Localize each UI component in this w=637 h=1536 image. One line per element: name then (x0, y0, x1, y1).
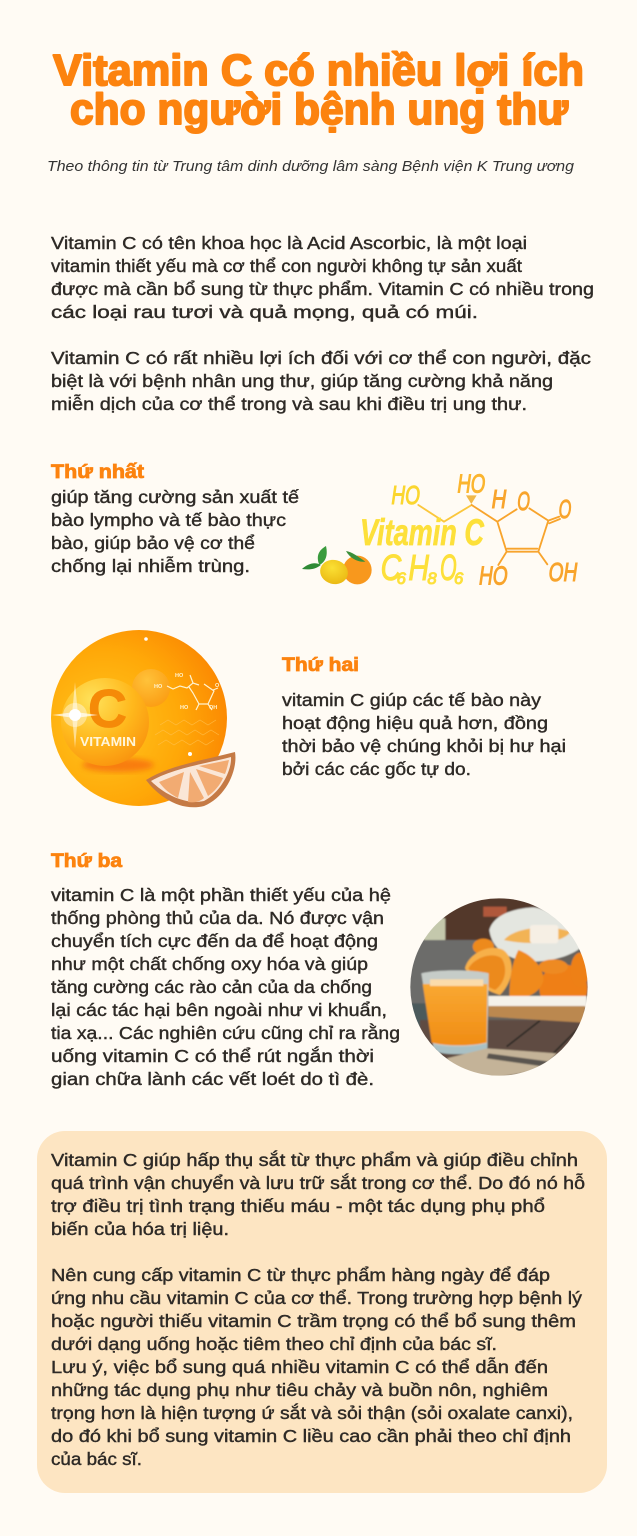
molecule labels: HO (180, 705, 189, 711)
sphere shadow (82, 758, 154, 772)
molecule labels: OH (549, 557, 577, 587)
text: recommendations and warnings: hoặc người thiếu vitamin C trầm trọng có thể bổ sung thêm (51, 1311, 576, 1331)
honeycomb pattern (155, 720, 219, 745)
formula: O (440, 547, 457, 588)
squeezer bowl (489, 907, 580, 962)
text: thứ hai (282, 690, 566, 779)
molecule labels: HO (175, 673, 184, 679)
molecule labels: O (559, 494, 571, 524)
text: thứ ba: như một chất chống oxy hóa và giúp (51, 954, 368, 974)
text: thứ ba: gian chữa lành các vết loét do tì đè. (51, 1069, 374, 1089)
back sphere (132, 669, 170, 707)
text: iron absorption: Vitamin C giúp hấp thụ sắt từ thực phẩm và giúp điều chỉnh (51, 1149, 578, 1170)
heading: thứ ba: Thứ ba (51, 851, 122, 872)
sparkle highlight (52, 637, 192, 756)
intro paragraph 2: Vitamin C có rất nhiều lợi ích đối với cơ thể con người, đặc (51, 348, 591, 368)
text: thứ nhất: bào, giúp bảo vệ cơ thể (51, 533, 255, 553)
panel: summary and advice (37, 1131, 607, 1493)
text: thứ nhất: bào lympho và tế bào thực (51, 510, 286, 530)
text: thứ hai: thời bảo vệ chúng khỏi bị hư hại (282, 736, 566, 756)
wooden table (420, 1020, 580, 1059)
molecule bonds (418, 495, 560, 565)
formula: C (381, 547, 402, 588)
label VITAMIN: VITAMIN (80, 734, 136, 749)
formula: 6 (454, 569, 464, 588)
subtitle: Theo thông tin từ Trung tâm dinh dưỡng lâm sàng Bệnh viện K Trung ương (47, 159, 574, 175)
illustration: vitamin C molecule with citrus fruit (302, 469, 577, 591)
text: thứ nhất: chống lại nhiễm trùng. (51, 555, 250, 576)
woven mat (447, 1048, 557, 1080)
intro paragraph 1: các loại rau tươi và quả mọng, quả có múi. (51, 302, 478, 322)
formula: 8 (427, 569, 437, 588)
text: thứ ba (51, 885, 400, 1089)
title: Vitamin C có nhiều lợi ích (53, 46, 584, 95)
panel background (37, 1131, 607, 1493)
molecule labels: HO (391, 480, 420, 510)
molecule labels: H (492, 484, 506, 514)
section: thứ hai (282, 655, 566, 779)
molecule labels: OH (209, 705, 217, 711)
intro paragraph 1: được mà cần bổ sung từ thực phẩm. Vitamin C có nhiều trong (51, 279, 594, 299)
formula: 6 (397, 569, 407, 588)
intro paragraph 2: biệt là với bệnh nhân ung thư, giúp tăng cường khả năng (51, 371, 553, 391)
text: thứ hai: bởi các các gốc tự do. (282, 759, 471, 779)
text: recommendations and warnings: Nên cung cấp vitamin C từ thực phẩm hàng ngày để đáp (51, 1265, 550, 1285)
molecule labels: O (517, 486, 530, 516)
illustration: vitamin C sphere with orange slice (51, 630, 235, 807)
text: recommendations and warnings: những tác dụng phụ như tiêu chảy và buồn nôn, nghiêm (51, 1380, 548, 1400)
text: thứ hai: hoạt động hiệu quả hơn, đồng (282, 713, 548, 733)
orange background circle (51, 630, 227, 806)
vitamin sphere (61, 678, 149, 766)
title: cho người bệnh ung thư (70, 85, 568, 134)
heading: thứ nhất: Thứ nhất (51, 462, 145, 483)
text: thứ ba: tia xạ... Các nghiên cứu cũng chỉ ra rằng (51, 1022, 400, 1043)
molecule labels: HO (154, 684, 163, 690)
text: thứ ba: chuyển tích cực đến da để hoạt động (51, 931, 378, 951)
text: recommendations and warnings: Lưu ý, việc bổ sung quá nhiều vitamin C có thể dẫn đến (51, 1356, 548, 1377)
formula: H (408, 547, 430, 588)
text: recommendations and warnings: do đó khi bổ sung vitamin C liều cao cần phải theo chỉ định (51, 1426, 571, 1446)
text: recommendations and warnings: ứng nhu cầu vitamin C của cơ thể. Trong trường hợp bệnh lý (51, 1288, 582, 1308)
letter C: C (88, 679, 127, 739)
text: thứ ba: vitamin C là một phần thiết yếu của hệ (51, 885, 391, 905)
text: thứ ba: tăng cường các rào cản của da chống (51, 977, 372, 997)
text: recommendations and warnings: trọng hơn là hiện tượng ứ sắt và sỏi thận (sỏi oxalate canxi), (51, 1402, 573, 1423)
text: thứ nhất (51, 487, 299, 576)
text: thứ ba: uống vitamin C có thể rút ngắn thời (51, 1045, 374, 1066)
photo: glass of orange juice with oranges (407, 893, 593, 1080)
icon: lemon and orange (302, 546, 372, 587)
wooden tray (488, 996, 587, 1007)
molecule labels: O (215, 683, 220, 689)
section: thứ nhất (51, 462, 299, 576)
text: recommendations and warnings: dưới dạng uống hoặc tiêm theo chỉ định của bác sĩ. (51, 1334, 497, 1354)
text: iron absorption: quá trình vận chuyển và lưu trữ sắt trong cơ thể. Do đó nó hỗ (51, 1172, 585, 1193)
title (53, 46, 584, 134)
text: thứ ba: lại các tác hại bên ngoài như vi khuẩn, (51, 1000, 387, 1020)
intro paragraph 1: Vitamin C có tên khoa học là Acid Ascorbic, là một loại (51, 233, 527, 253)
text: thứ ba: thống phòng thủ của da. Nó được vận (51, 908, 384, 928)
text: iron absorption: trợ điều trị tình trạng thiếu máu - một tác dụng phụ phổ (51, 1196, 545, 1216)
label: Vitamin C: Vitamin C (360, 511, 485, 553)
text: recommendations and warnings (51, 1265, 582, 1469)
oranges (538, 964, 588, 997)
section: thứ ba (51, 851, 400, 1089)
intro paragraph 2: miễn dịch của cơ thể trong và sau khi điều trị ung thư. (51, 393, 527, 414)
juice glass (421, 970, 489, 1054)
orange slice (146, 752, 235, 807)
molecule diagram (167, 675, 218, 710)
formula (381, 547, 464, 588)
molecule labels (154, 673, 220, 711)
blurred background (410, 910, 588, 1021)
heading: thứ hai: Thứ hai (282, 655, 359, 676)
text: thứ hai: vitamin C giúp các tế bào này (282, 690, 541, 710)
molecule labels: HO (457, 469, 485, 499)
molecule labels (391, 469, 577, 591)
molecule labels: HO (479, 561, 508, 591)
text: thứ nhất: giúp tăng cường sản xuất tế (51, 487, 299, 507)
text: iron absorption (51, 1149, 585, 1239)
intro paragraph 2 (51, 348, 591, 414)
text: iron absorption: biến của hóa trị liệu. (51, 1219, 229, 1239)
intro paragraph 1: vitamin thiết yếu mà cơ thể con người không tự sản xuất (51, 256, 522, 276)
intro paragraph 1 (51, 233, 594, 322)
text: recommendations and warnings: của bác sĩ. (51, 1449, 142, 1469)
